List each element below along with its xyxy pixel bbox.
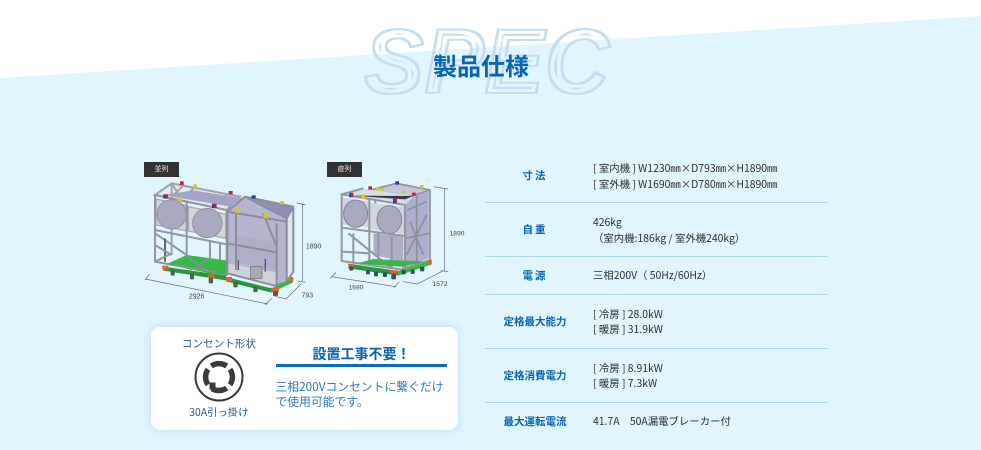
dimension lines	[145, 203, 306, 305]
dimension labels: 1890	[450, 230, 465, 237]
rear unit	[370, 183, 430, 267]
dimension labels: 1572	[433, 281, 448, 288]
row label: rated consumption: 定格消費電力	[504, 368, 566, 383]
feet	[162, 266, 293, 292]
row value: rated capacity: [ 暖房 ] 31.9kW	[593, 321, 663, 336]
tag: side by side: 並列	[154, 164, 168, 174]
icon: 30A twist-lock socket	[194, 352, 244, 402]
row value: dimensions: [ 室内機 ] W1230㎜×D793㎜×H1890㎜	[593, 160, 777, 175]
green base right	[226, 277, 272, 293]
dimension lines	[330, 187, 448, 288]
tag: front to back: 直列	[338, 164, 352, 174]
tag: front to back	[327, 162, 362, 177]
right unit	[245, 197, 293, 218]
left unit top frame	[155, 183, 240, 255]
left fan panels	[156, 199, 187, 231]
row value: dimensions: [ 室外機 ] W1690㎜×D780㎜×H1890㎜	[593, 176, 777, 190]
dimension labels: 1890	[306, 243, 322, 250]
row label: dimensions: 寸法	[522, 168, 548, 183]
row value: max current: 41.7A 50A漏電ブレーカー付	[593, 413, 731, 428]
green base left	[167, 255, 226, 274]
row label: rated capacity: 定格最大能力	[504, 314, 566, 329]
illustration: front to back units	[330, 181, 465, 292]
row value: rated capacity: [ 冷房 ] 28.0kW	[593, 306, 663, 320]
card heading: 設置工事不要！	[312, 344, 410, 364]
dimension labels: 1690	[349, 285, 364, 292]
marker tags	[349, 181, 424, 203]
marker tags	[163, 181, 284, 218]
dimension labels: 2926	[189, 293, 205, 300]
row value: rated consumption: [ 暖房 ] 7.3kW	[593, 375, 657, 390]
title: 製品仕様	[433, 47, 529, 82]
green base	[357, 259, 428, 267]
socket label: コンセント形状	[182, 336, 256, 350]
row value: rated capacity	[593, 306, 663, 336]
dimension labels	[189, 243, 322, 300]
row label: max current: 最大運転電流	[504, 414, 566, 429]
feet	[348, 260, 432, 273]
row value: rated consumption	[593, 360, 663, 390]
socket type label: 30A引っ掛け	[189, 404, 249, 419]
card body text: 三相200Vコンセントに繋ぐだけ	[276, 378, 444, 394]
row label: weight: 自重	[522, 222, 548, 237]
row value: rated consumption: [ 冷房 ] 8.91kW	[593, 360, 663, 374]
row value: dimensions	[593, 160, 778, 190]
illustration: side by side units	[144, 181, 322, 306]
row value: power: 三相200V（ 50Hz/60Hz）	[593, 267, 712, 282]
tag: side by side	[144, 162, 179, 177]
row value: weight: （室内機:186kg / 室外機240kg）	[593, 230, 745, 244]
row value: weight	[593, 214, 745, 244]
panel: installation card	[151, 327, 458, 430]
card body text: で使用可能です。	[276, 392, 369, 410]
dimension labels	[349, 230, 465, 292]
card body text	[276, 378, 444, 410]
roof band	[163, 190, 243, 207]
heading underline	[276, 364, 447, 367]
left frame	[155, 195, 227, 275]
row label: power: 電源	[522, 268, 548, 283]
row value: weight: 426kg	[593, 214, 622, 229]
front unit	[342, 188, 413, 205]
dimension labels: 793	[301, 292, 313, 299]
